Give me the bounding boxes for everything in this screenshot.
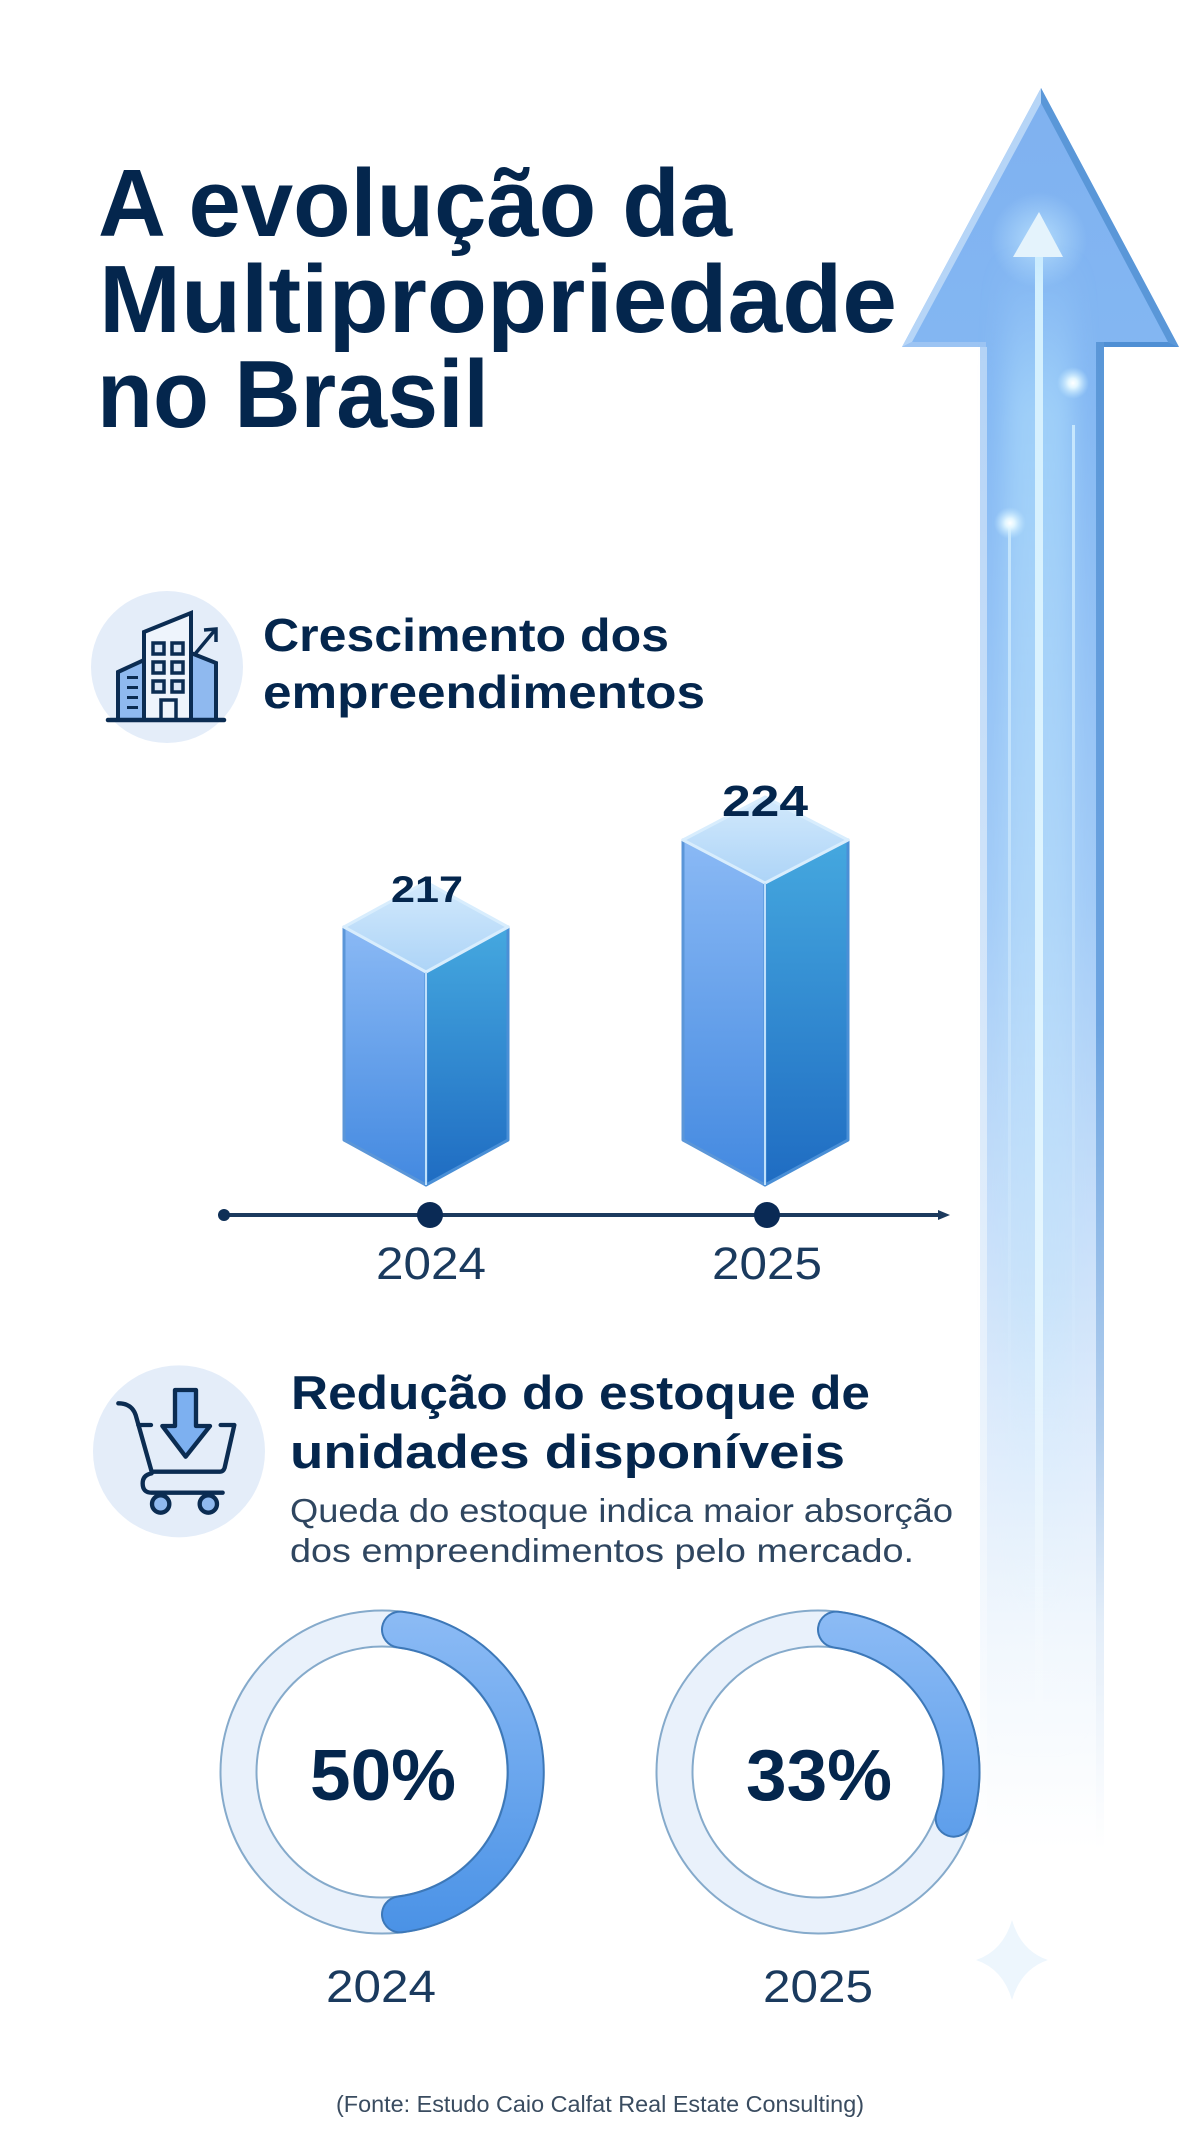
donut chart: 2024 50% [238, 1628, 526, 1916]
donut label: 2024: 2024 [326, 1961, 436, 2012]
axis label: 2025: 2025 [712, 1238, 822, 1289]
donut label: 2025: 2025 [763, 1961, 873, 2012]
heading: redução do estoque [290, 1366, 870, 1478]
bar: 2025 [683, 777, 848, 1185]
bar: 2025: 224 [722, 777, 809, 826]
icon: faint sparkle star [976, 1920, 1048, 2000]
heading: redução do estoque: Redução do estoque de [291, 1366, 870, 1419]
text block: descrição: dos empreendimentos pelo mercado. [290, 1532, 914, 1569]
heading: crescimento: Crescimento dos [263, 609, 669, 661]
bar: 2024: 217 [391, 869, 463, 910]
arrow: large upward growth arrow [902, 88, 1179, 1850]
title [97, 150, 897, 448]
donut chart: 2025 33% [674, 1628, 962, 1916]
heading: redução do estoque: unidades disponíveis [290, 1425, 845, 1478]
timeline axis [218, 1202, 950, 1228]
source note: (Fonte: Estudo Caio Calfat Real Estate Consulting) [336, 2091, 864, 2117]
bar: 2024 [344, 869, 508, 1185]
donut chart: 2025 33%: 33% [746, 1736, 892, 1816]
panel: crescimento dos empreendimentos [91, 591, 950, 1289]
text block: descrição: Queda do estoque indica maior absorção [290, 1492, 953, 1529]
text block: descrição [290, 1492, 953, 1569]
axis label: 2024: 2024 [376, 1238, 486, 1289]
title: no Brasil [97, 341, 489, 448]
heading: crescimento: empreendimentos [263, 666, 705, 718]
donut chart: 2024 50%: 50% [310, 1736, 456, 1816]
bar chart: empreendimentos por ano [218, 777, 950, 1289]
heading: crescimento [263, 609, 705, 718]
icon: buildings with rising arrow [91, 591, 243, 743]
title: A evolução da [98, 150, 733, 257]
panel: redução do estoque [93, 1365, 962, 2012]
icon: shopping cart with down arrow [93, 1365, 265, 1537]
title: Multipropriedade [99, 246, 897, 353]
